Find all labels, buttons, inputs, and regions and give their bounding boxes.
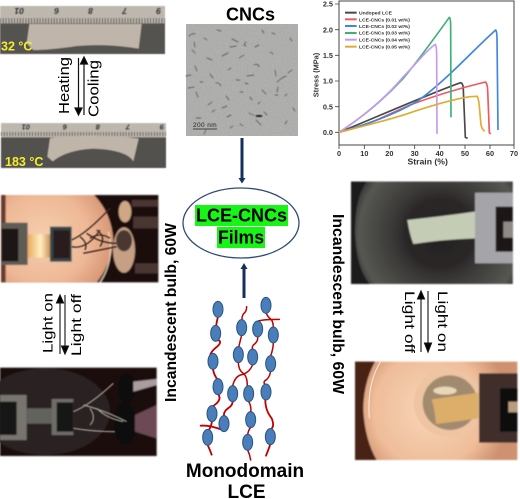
photo: film with light off, right — [351, 182, 513, 284]
x-axis tick labels: 40 — [436, 149, 444, 158]
label: incandescent bulb, left: Incandescent bulb, 60W — [163, 223, 180, 402]
curve: 0.04 wt% — [339, 44, 437, 134]
label: LCE-CNCs: LCE-CNCs — [196, 206, 287, 226]
x-axis tick labels: 0 — [337, 149, 341, 158]
light on / light off labels, left: Light on — [40, 293, 56, 353]
x-axis tick labels: 60 — [486, 149, 494, 158]
ruler digits: 9 — [156, 6, 161, 16]
arrow: heating down — [75, 58, 82, 115]
ruler digits: 8 — [88, 6, 93, 16]
curve: 0.03 wt% — [339, 17, 451, 132]
green highlight: Films — [217, 227, 265, 248]
label: 32 °C: 32 °C — [1, 40, 32, 54]
photo: bulb with light on, left — [1, 195, 158, 282]
x-axis tick labels: 10 — [360, 149, 368, 158]
y-axis tick labels: 1.5 — [323, 51, 333, 60]
arrow: light off up — [418, 291, 424, 352]
label: 183 °C: 183 °C — [5, 155, 43, 169]
light off / light on labels, right: Light off — [402, 291, 418, 353]
ruler digits: 01 — [14, 6, 24, 16]
arrow: monodomain LCE up to films — [240, 263, 248, 298]
ruler digits: 7 — [121, 6, 127, 16]
x-axis tick labels: 70 — [510, 149, 518, 158]
label: Monodomain LCE — [186, 461, 304, 499]
curve: undoped LCE — [339, 83, 468, 138]
ruler digits: 8 — [95, 122, 100, 132]
x-axis tick labels: 30 — [411, 149, 419, 158]
y-axis tick labels: 0.0 — [323, 128, 333, 137]
heating and cooling labels with arrows: Heating — [57, 57, 73, 114]
photo: film with light on, right — [355, 362, 517, 460]
legend: LCE-CNCs (0.04 wt%) — [359, 38, 410, 44]
x-axis tick labels: 50 — [461, 149, 469, 158]
arrow: light on up — [56, 295, 64, 354]
ruler digits: 7 — [125, 122, 130, 132]
heading: CNCs: CNCs — [226, 4, 275, 24]
x-axis tick labels — [337, 149, 518, 158]
heating and cooling labels with arrows — [57, 57, 102, 117]
polymer backbone — [201, 307, 279, 460]
arrow: light on down — [424, 291, 432, 352]
curve: 0.02 wt% — [339, 30, 498, 132]
label: incandescent bulb, right: Incandescent bulb, 60W — [329, 214, 346, 394]
y-axis title: Stress (MPa) — [312, 52, 321, 97]
photo: film at 32 °C with ruler — [0, 6, 165, 54]
scale bar: 200 nm — [193, 122, 217, 129]
stress-strain chart — [312, 0, 518, 166]
photo: film at 183 °C with ruler — [1, 122, 166, 169]
arrow: cooling up — [80, 57, 88, 115]
legend: LCE-CNCs (0.05 wt%) — [359, 44, 410, 50]
curves — [339, 17, 498, 138]
curve: 0.05 wt% — [339, 96, 485, 132]
ruler digits — [22, 122, 164, 132]
y-axis tick labels — [323, 0, 333, 137]
mesogen units — [203, 297, 278, 450]
light on / light off labels, left: Light off — [68, 294, 84, 356]
green highlight: LCE-CNCs — [195, 205, 288, 226]
curve: 0.01 wt% — [339, 82, 491, 134]
legend: LCE-CNCs (0.02 wt%) — [359, 24, 410, 30]
ruler digits: 6 — [62, 122, 67, 132]
light off / light on labels, right — [402, 291, 451, 353]
ruler digits: 9 — [159, 122, 164, 132]
x-axis title: Strain (%) — [407, 156, 448, 166]
light off / light on labels, right: Light on — [435, 291, 451, 352]
y-axis tick labels: 0.5 — [323, 102, 333, 111]
ruler digits: 01 — [22, 122, 30, 132]
legend: LCE-CNCs (0.01 wt%) — [359, 17, 410, 23]
photo: CNCs electron micrograph — [186, 24, 298, 136]
light on / light off labels, left — [40, 293, 84, 356]
photo: bulb with light off, left — [0, 368, 157, 456]
monodomain LCE molecular chains — [201, 297, 279, 460]
ruler digits: 6 — [54, 6, 59, 16]
ruler digits — [14, 6, 161, 16]
label: Films: Films — [218, 228, 264, 248]
y-axis ticks — [335, 4, 514, 149]
arrow: CNCs down to films — [238, 138, 246, 184]
label: Monodomain LCE: Monodomain — [186, 461, 304, 482]
CNC rods — [186, 30, 295, 134]
y-axis tick labels: 2.0 — [323, 25, 333, 34]
legend — [345, 10, 410, 50]
plot frame — [339, 1, 514, 145]
legend: Undoped LCE — [359, 10, 393, 16]
legend: LCE-CNCs (0.03 wt%) — [359, 31, 410, 37]
x-axis tick labels: 20 — [385, 149, 393, 158]
arrow: light off down — [62, 295, 68, 354]
heating and cooling labels with arrows: Cooling — [86, 60, 102, 117]
ellipse: LCE-CNCs Films — [183, 188, 299, 258]
y-axis tick labels: 1.0 — [323, 77, 333, 86]
